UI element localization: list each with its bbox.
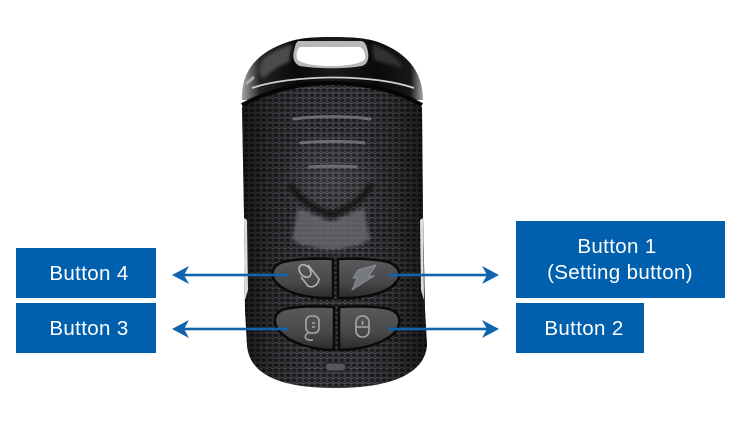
label: Button 4: [16, 248, 156, 298]
label: Button 4: Button 4: [49, 262, 129, 285]
label: Button 3: Button 3: [49, 317, 129, 340]
label: Button 2: [516, 303, 644, 353]
button: bottom right: [339, 306, 399, 350]
body edge shading: [242, 85, 427, 388]
chrome top cap: [242, 37, 423, 100]
label: Button 1 (Setting button): [516, 221, 725, 298]
icon: locked padlock: [356, 316, 369, 337]
key fob: [242, 37, 427, 388]
textured body: [242, 85, 427, 388]
label: Button 2: Button 2: [544, 317, 624, 340]
central light highlight: [292, 208, 370, 249]
label: Button 1 (Setting button): Button 1: [577, 235, 657, 258]
icon: alarm bell: [297, 262, 319, 287]
dark seam under cap: [242, 83, 422, 105]
arrow: to Button 4: [172, 266, 288, 284]
indicator light: [325, 363, 346, 371]
dark chevron: [290, 184, 372, 214]
raised grooves: [294, 117, 370, 167]
button: top right: [338, 259, 399, 298]
arrow: to Button 1: [388, 266, 499, 284]
silver side strips: [244, 218, 424, 300]
arrow: to Button 3: [172, 320, 288, 338]
label: Button 3: [16, 303, 156, 353]
arrow: to Button 2: [388, 320, 499, 338]
key ring hole: [293, 41, 368, 68]
icon: unlocked padlock: [305, 316, 319, 340]
icon: lightning bolt: [352, 265, 376, 290]
button: top left: [272, 259, 333, 298]
label: Button 1 (Setting button): (Setting button): [547, 261, 693, 284]
button: bottom left: [275, 306, 334, 350]
